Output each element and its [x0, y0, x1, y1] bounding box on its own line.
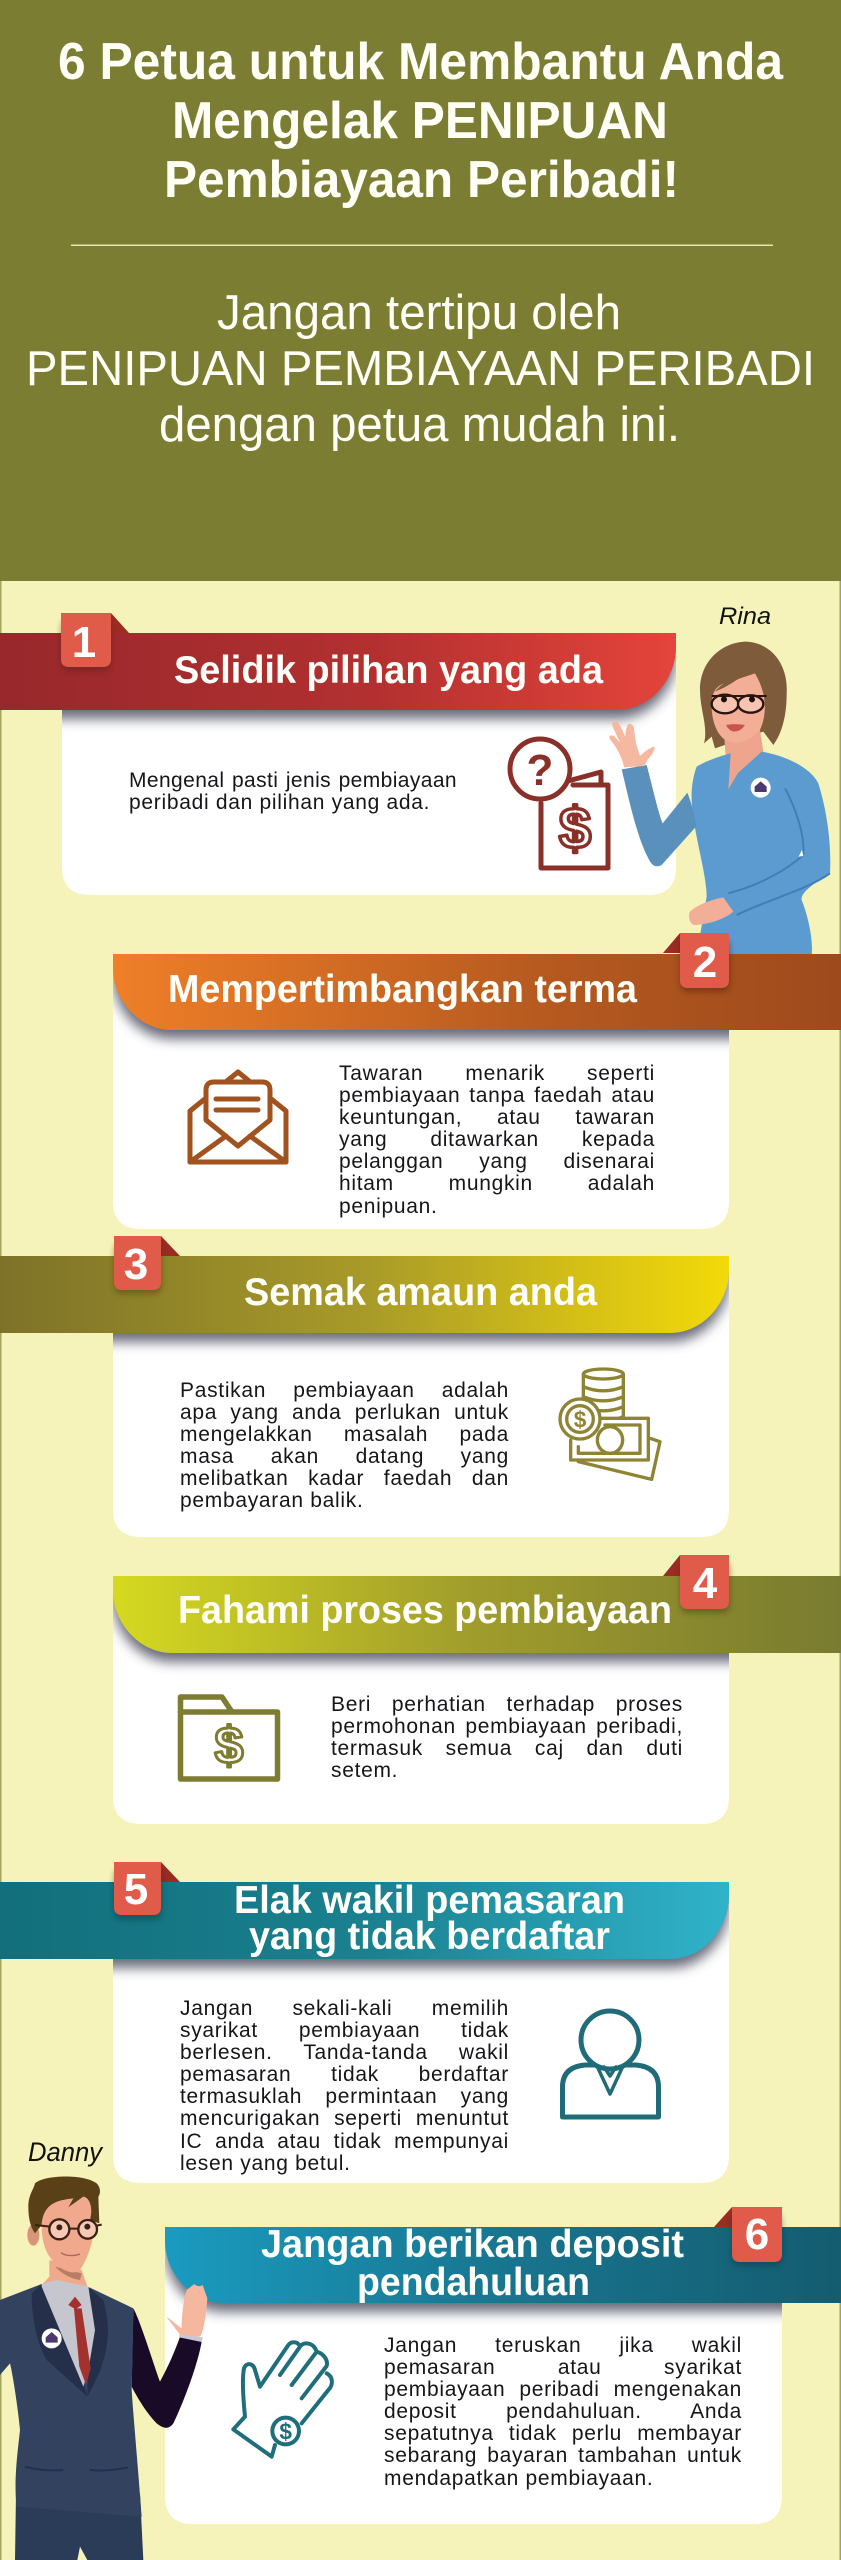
text 6: sepatutnya tidak perlu membayar [384, 2422, 742, 2445]
subtitle: PENIPUAN PEMBIAYAAN PERIBADI [26, 342, 815, 396]
text 5: IC anda atau tidak mempunyai [180, 2130, 509, 2153]
heading 2: Mempertimbangkan terma [168, 968, 637, 1011]
panel: tip 3 [0, 1236, 729, 1537]
text 5 [180, 1998, 509, 2178]
icon: question and dollar document: ? [527, 746, 553, 795]
title [58, 33, 784, 209]
panel: tip 5 [0, 1862, 729, 2183]
badge 3: 3 [124, 1240, 148, 1289]
heading 1: Selidik pilihan yang ada [174, 649, 603, 692]
label: Danny: Danny [28, 2137, 103, 2167]
panel: tip 2 [113, 933, 841, 1229]
text 5: mencurigakan seperti menuntut [180, 2107, 509, 2130]
text 2: yang ditawarkan kepada [339, 1128, 655, 1151]
title: Pembiayaan Peribadi! [164, 151, 679, 209]
icon: hand with coin: $ [279, 2418, 292, 2444]
text 3: mengelakkan masalah pada [180, 1423, 509, 1446]
text 6 [384, 2335, 742, 2495]
text 3: masa akan datang yang [180, 1445, 509, 1468]
badge 5: 5 [124, 1865, 148, 1914]
badge 4: 4 [693, 1559, 718, 1608]
header panel [0, 0, 841, 581]
text 5: pemasaran tidak berdaftar [180, 2063, 509, 2086]
subtitle: dengan petua mudah ini. [159, 398, 680, 452]
banner 1 [0, 633, 676, 710]
icon: question and dollar document [510, 739, 608, 868]
icon: coins and banknotes [560, 1369, 660, 1479]
badge 1: 1 [72, 618, 96, 667]
banner 3 [0, 1256, 729, 1333]
text 3: pembayaran balik. [180, 1489, 364, 1512]
banner 6 [165, 2227, 841, 2303]
text 4: permohonan pembiayaan peribadi, [331, 1715, 683, 1738]
icon: open envelope [190, 1072, 286, 1162]
badge 4 [663, 1555, 730, 1613]
text 4 [331, 1694, 683, 1789]
text 2: keuntungan, atau tawaran [339, 1106, 655, 1129]
text 5: berlesen. Tanda-tanda wakil [180, 2041, 509, 2064]
badge 6: 6 [745, 2210, 769, 2259]
label: Rina: Rina [719, 603, 771, 630]
panel: tip 6 [165, 2207, 841, 2524]
text 6: pembiayaan peribadi mengenakan [384, 2378, 742, 2401]
text 2 [339, 1063, 655, 1223]
text 5: lesen yang betul. [180, 2152, 351, 2175]
text 2: pelanggan yang disenarai [339, 1150, 655, 1173]
icon: hand with coin [233, 2342, 332, 2457]
heading 5 [234, 1879, 625, 1958]
text 5: syarikat pembiayaan tidak [180, 2019, 509, 2042]
text 3: melibatkan kadar faedah dan [180, 1467, 509, 1490]
subtitle: Jangan tertipu oleh [217, 286, 621, 340]
icon: coins and banknotes: $ [574, 1406, 587, 1432]
icon: dollar folder [180, 1697, 278, 1779]
heading 5: yang tidak berdaftar [249, 1915, 610, 1958]
badge 1 [61, 613, 129, 671]
text 6: mendapatkan pembiayaan. [384, 2467, 653, 2490]
panel: tip 1 [0, 613, 676, 895]
heading 3: Semak amaun anda [244, 1271, 597, 1314]
text 2: pembiayaan tanpa faedah atau [339, 1084, 655, 1107]
text 4: termasuk semua caj dan duti [331, 1737, 683, 1760]
heading 6: pendahuluan [357, 2261, 590, 2304]
text 3 [180, 1380, 509, 1520]
banner 4 [113, 1576, 841, 1653]
icon: person in suit [562, 2011, 658, 2117]
title: Mengelak PENIPUAN [172, 92, 668, 150]
icon: dollar folder: $ [215, 1717, 244, 1775]
badge 2 [663, 933, 730, 992]
banner 2 [113, 954, 841, 1030]
text 2: penipuan. [339, 1195, 438, 1218]
character: Rina [609, 603, 830, 955]
panel: tip 4 [113, 1555, 841, 1824]
text 5: termasuklah permintaan yang [180, 2085, 509, 2108]
badge 3 [114, 1236, 180, 1294]
title: 6 Petua untuk Membantu Anda [58, 33, 784, 91]
text 4: setem. [331, 1759, 398, 1782]
text 2: hitam mungkin adalah [339, 1172, 655, 1195]
text 6: pemasaran atau syarikat [384, 2356, 742, 2379]
text 1 [129, 770, 457, 818]
heading 4: Fahami proses pembiayaan [178, 1589, 672, 1632]
subtitle [26, 286, 815, 452]
text 6: sebarang bayaran tambahan untuk [384, 2444, 742, 2467]
heading 6: Jangan berikan deposit [261, 2223, 684, 2266]
icon: question and dollar document: $ [559, 796, 591, 861]
text 3: apa yang anda perlukan untuk [180, 1401, 509, 1424]
character: Danny [0, 2137, 207, 2560]
heading 6 [261, 2223, 684, 2304]
badge 6 [714, 2207, 782, 2266]
badge 5 [114, 1862, 180, 1920]
text 1: peribadi dan pilihan yang ada. [129, 791, 430, 814]
text 6: deposit pendahuluan. Anda [384, 2400, 742, 2423]
heading 5: Elak wakil pemasaran [234, 1879, 625, 1922]
badge 2: 2 [693, 938, 717, 987]
banner 5 [0, 1882, 729, 1959]
